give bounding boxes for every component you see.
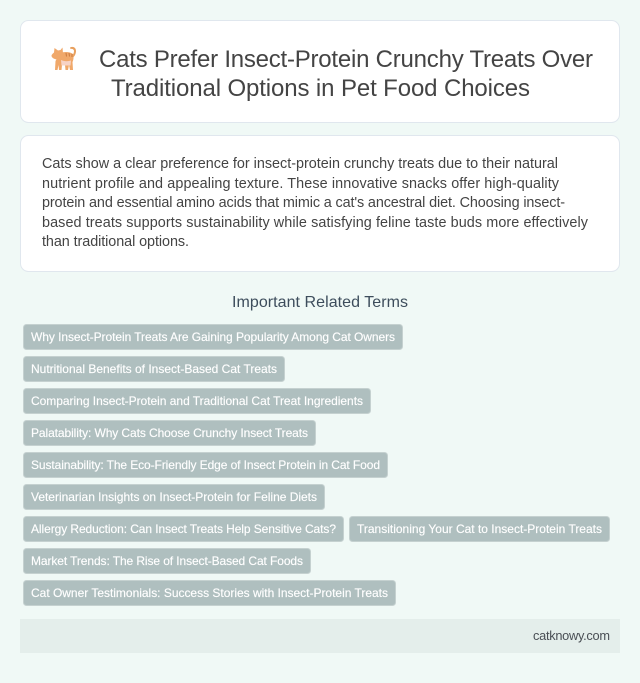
heading: related terms: Important Related Terms [232,294,408,311]
tag 3 [24,388,370,414]
tag 2: Nutritional Benefits of Insect-Based Cat Treats [31,362,277,376]
title: Cats Prefer Insect-Protein Crunchy Treats Over [99,46,593,73]
tag 8: Transitioning Your Cat to Insect-Protein Treats [357,522,602,536]
tag 4: Palatability: Why Cats Choose Crunchy Insect Treats [31,426,308,440]
tag 6 [24,484,324,510]
tag list [24,324,610,606]
tag 7: Allergy Reduction: Can Insect Treats Help Sensitive Cats? [31,522,336,536]
text block: summary: protein and essential amino acids that mimic a cat's ancestral diet. Choosing insect- [42,195,565,211]
text block: summary: Cats show a clear preference for insect-protein crunchy treats due to their natural [42,156,558,172]
tag 6: Veterinarian Insights on Insect-Protein for Feline Diets [31,490,317,504]
tag 5: Sustainability: The Eco-Friendly Edge of Insect Protein in Cat Food [31,458,380,472]
text block: summary: based treats supports sustainability while satisfying feline taste buds more effectively [42,215,589,231]
panel: summary text card [20,136,620,272]
title [99,46,593,102]
tag 7 [24,516,344,542]
tag 1: Why Insect-Protein Treats Are Gaining Popularity Among Cat Owners [31,330,395,344]
text block: summary: than traditional options. [42,234,189,250]
tag 9: Market Trends: The Rise of Insect-Based Cat Foods [31,554,303,568]
tag 2 [24,356,284,382]
tag 9 [24,548,310,574]
tag 3: Comparing Insect-Protein and Traditional Cat Treat Ingredients [31,394,363,408]
tag 4 [24,420,316,446]
tag 8 [350,516,610,542]
icon: orange cat [52,47,76,70]
tag 5 [24,452,388,478]
footer: catknowy.com [533,628,610,643]
footer [20,619,620,653]
tag 10 [24,580,396,606]
panel: title card [20,20,620,122]
tag 10: Cat Owner Testimonials: Success Stories with Insect-Protein Treats [31,586,388,600]
tag 1 [24,324,402,350]
title: Traditional Options in Pet Food Choices [111,75,530,102]
text block: summary: nutrient profile and appealing texture. These innovative snacks offer high-quality [42,176,560,192]
text block: summary [42,156,589,250]
